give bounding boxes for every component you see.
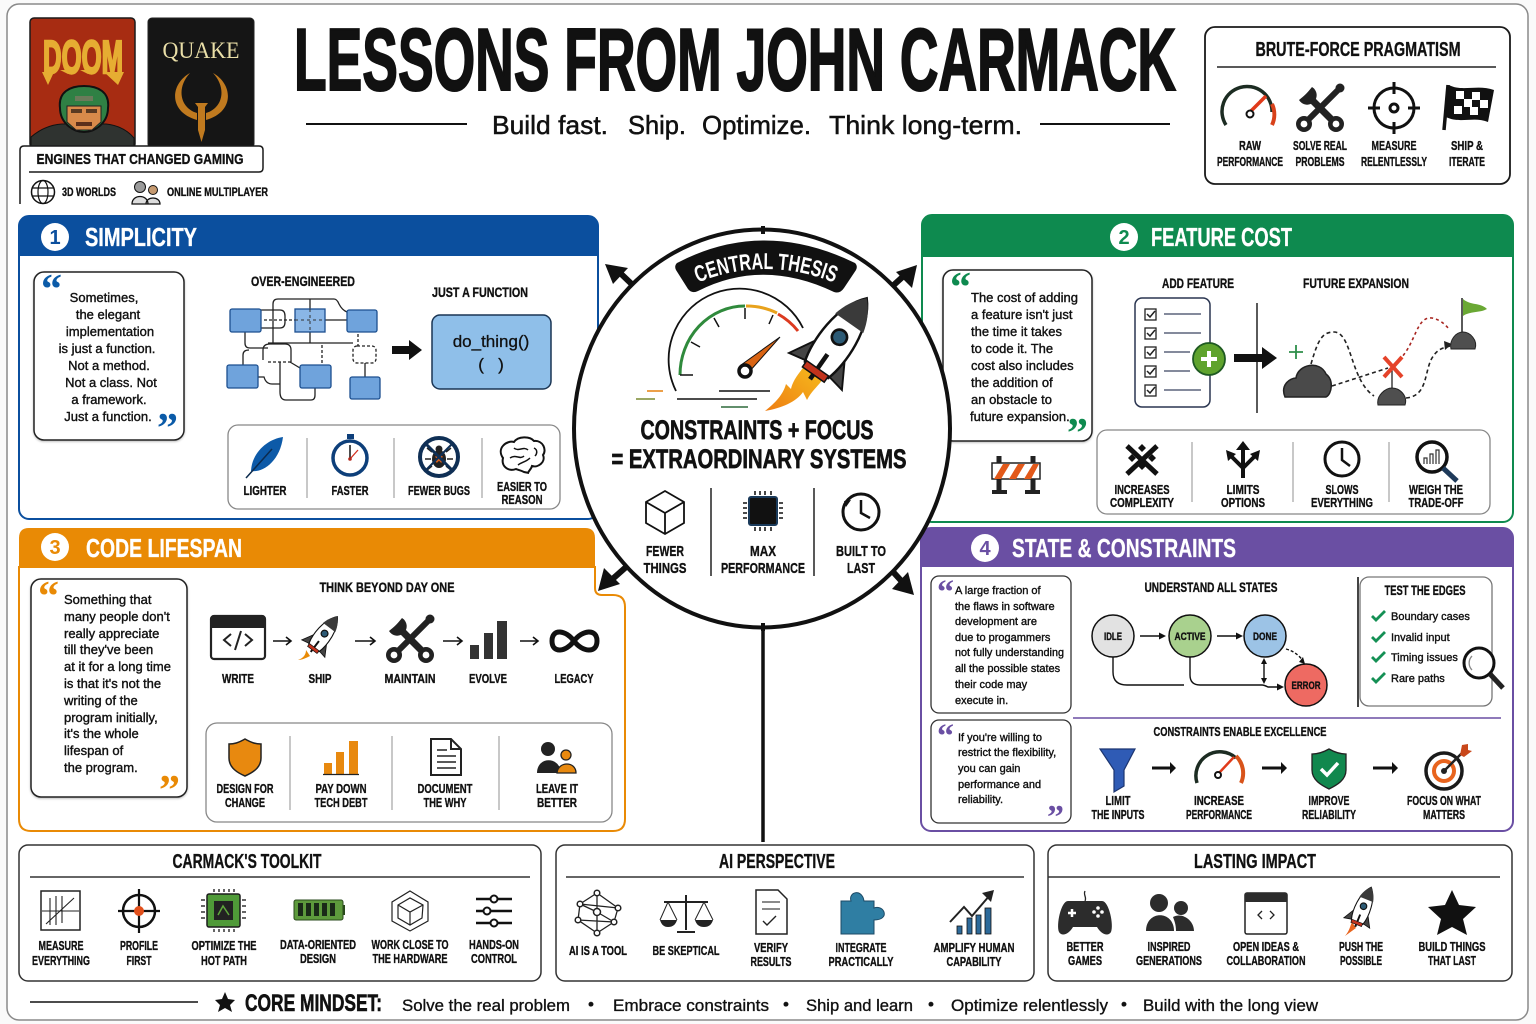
icon: globe, 3D worlds xyxy=(32,180,116,204)
icon: cube, fewer things: THINGS xyxy=(644,560,686,577)
heading: think beyond day one: THINK BEYOND DAY ONE xyxy=(320,579,454,595)
header: simplicity: 1 xyxy=(49,227,61,249)
mindset items: • xyxy=(783,995,789,1014)
tool: work close to the hardware xyxy=(372,891,448,966)
quote: code lifespan: it's the whole xyxy=(64,726,139,741)
state: done: DONE xyxy=(1253,631,1277,643)
impact: open ideas window: OPEN IDEAS & xyxy=(1233,939,1299,954)
mindset items: Solve the real problem xyxy=(402,996,570,1015)
quote: flaws in software: “ xyxy=(937,574,954,611)
mindset items: • xyxy=(928,995,934,1014)
cover: DOOM: DOOM xyxy=(43,31,123,83)
panel: test the edges xyxy=(1358,577,1503,707)
ai: integrate practically puzzle: PRACTICALLY xyxy=(828,954,894,969)
state: active xyxy=(1169,615,1211,657)
icon: evolve bars xyxy=(469,621,507,686)
icon: shield, improve reliability: IMPROVE xyxy=(1308,793,1350,808)
heading: over-engineered: OVER-ENGINEERED xyxy=(251,273,355,289)
quote: simplicity: the elegant xyxy=(76,307,141,322)
icon: bars, pay down tech debt: PAY DOWN xyxy=(316,781,366,796)
quote: restrict the flexibility xyxy=(931,718,1071,836)
quote: feature cost: “ xyxy=(950,265,971,311)
icon: gauge, increase performance: INCREASE xyxy=(1194,793,1244,808)
icon: increases complexity xyxy=(1110,444,1174,510)
icon: weigh the trade-off magnifier: TRADE-OFF xyxy=(1408,495,1464,510)
label: ship and iterate: SHIP & xyxy=(1451,138,1483,153)
label: raw performance: PERFORMANCE xyxy=(1217,154,1283,169)
quote: simplicity: a framework. xyxy=(71,392,147,407)
header: state and constraints: STATE & CONSTRAINTS xyxy=(1012,533,1236,563)
quote: restrict the flexibility: performance and xyxy=(958,779,1041,791)
central thesis circle xyxy=(572,226,952,631)
icon: target, focus on what matters: MATTERS xyxy=(1423,807,1465,822)
icon: brain, easier to reason: REASON xyxy=(502,492,542,507)
impact: better games controller: GAMES xyxy=(1068,953,1102,968)
icon: increases complexity: INCREASES xyxy=(1114,482,1170,497)
label: ship and iterate: ITERATE xyxy=(1449,154,1485,169)
icon: slows everything clock: EVERYTHING xyxy=(1311,495,1373,510)
quote: flaws in software: the flaws in software xyxy=(955,601,1055,613)
mindset items: Optimize relentlessly xyxy=(951,996,1108,1015)
heading: future expansion: FUTURE EXPANSION xyxy=(1303,275,1409,291)
cover: QUAKE: QUAKE xyxy=(162,38,240,63)
icon: funnel, limit the inputs xyxy=(1092,749,1145,822)
icon: maintain tools xyxy=(384,614,436,686)
arrow xyxy=(1152,762,1176,774)
icon: weigh the trade-off magnifier: WEIGH THE xyxy=(1409,482,1463,497)
heading: ai perspective: AI PERSPECTIVE xyxy=(719,851,835,873)
quote: feature cost: ” xyxy=(1067,411,1088,457)
quote: flaws in software: all the possible states xyxy=(955,663,1061,675)
panel 4: state and constraints xyxy=(921,528,1513,836)
icon: bars, pay down tech debt: TECH DEBT xyxy=(314,795,368,810)
icon: ship rocket xyxy=(298,608,349,686)
tool: work close to the hardware: WORK CLOSE TO xyxy=(372,937,448,952)
ai: integrate practically puzzle xyxy=(828,893,894,969)
header: simplicity: SIMPLICITY xyxy=(85,222,197,252)
quote: code lifespan: “ xyxy=(38,574,59,620)
code box: do_thing xyxy=(432,315,551,389)
panel 3: code lifespan xyxy=(19,528,625,831)
impact: push the possible rocket: PUSH THE xyxy=(1339,939,1383,954)
ai: verify results document: RESULTS xyxy=(750,954,792,969)
icon: funnel, limit the inputs: LIMIT xyxy=(1106,793,1131,808)
quote: code lifespan: program initially, xyxy=(64,710,158,725)
icon: globe, 3D worlds: 3D WORLDS xyxy=(62,185,116,199)
heading: add feature: ADD FEATURE xyxy=(1162,275,1234,291)
quote: feature cost: the time it takes xyxy=(971,324,1063,339)
impact: build things star: BUILD THINGS xyxy=(1418,939,1486,954)
icon: ship rocket: SHIP xyxy=(308,671,332,686)
quote: restrict the flexibility: restrict the flexibility, xyxy=(958,747,1056,759)
quote: flaws in software: not fully understanding xyxy=(955,647,1064,659)
tool: optimize the hot path: HOT PATH xyxy=(201,953,247,968)
ai: amplify human capability chart: AMPLIFY HUMAN xyxy=(934,940,1014,955)
icon: feather, lighter xyxy=(244,437,287,498)
code box: do_thing: ( ) xyxy=(478,355,504,374)
ai: amplify human capability chart xyxy=(934,890,1014,969)
state: active: ACTIVE xyxy=(1174,631,1206,643)
quote: code lifespan: writing of the xyxy=(63,693,138,708)
icon: people, online multiplayer: ONLINE MULTIPLAYER xyxy=(167,185,268,199)
subtitle: Optimize. xyxy=(702,110,811,140)
icon: write code window: WRITE xyxy=(222,671,254,686)
quote: feature cost: an obstacle to xyxy=(971,392,1052,407)
icon: chip, max performance: MAX xyxy=(750,543,776,560)
icon: clock, built to last: LAST xyxy=(847,560,875,577)
icon: limits options: OPTIONS xyxy=(1221,495,1265,510)
benefits row xyxy=(228,425,560,509)
icon: star xyxy=(215,992,235,1012)
heading: understand all states: UNDERSTAND ALL STATES xyxy=(1144,579,1278,595)
quote: restrict the flexibility: reliability. xyxy=(958,794,1003,806)
quote: flaws in software: due to progammers xyxy=(955,632,1051,644)
icon: legacy infinity xyxy=(552,632,597,686)
header: simplicity xyxy=(19,216,598,256)
tool: measure everything: MEASURE xyxy=(38,938,84,953)
quote: code lifespan: Something that xyxy=(64,592,152,607)
cover: DOOM xyxy=(30,18,135,148)
panel: test the edges: Boundary cases xyxy=(1391,611,1470,623)
header: feature cost: 2 xyxy=(1118,227,1130,249)
game covers: engines that changed gaming xyxy=(20,18,268,204)
panel: test the edges: Rare paths xyxy=(1391,673,1445,685)
quote: simplicity xyxy=(34,267,184,452)
practices row xyxy=(206,723,612,822)
core mindset strip xyxy=(30,990,1319,1017)
impact: push the possible rocket xyxy=(1339,882,1384,968)
icon: magnifier xyxy=(1464,648,1503,688)
heading: lasting impact: LASTING IMPACT xyxy=(1194,851,1316,873)
subtitle: Think long-term. xyxy=(829,110,1022,140)
heading: constraints enable excellence: CONSTRAINTS ENABLE EXCELLENCE xyxy=(1154,724,1327,739)
icon: shield, design for change: CHANGE xyxy=(225,795,265,810)
label: solve real problems: SOLVE REAL xyxy=(1293,138,1347,153)
tool: work close to the hardware: THE HARDWARE xyxy=(372,951,448,966)
panel: test the edges: Timing issues xyxy=(1391,652,1458,664)
quote: feature cost: to code it. The xyxy=(971,341,1053,356)
code box: do_thing: do_thing() xyxy=(453,332,529,351)
icon: chip, max performance xyxy=(721,491,805,577)
icon: target, focus on what matters: FOCUS ON WHAT xyxy=(1407,793,1481,808)
quote: flaws in software: execute in. xyxy=(955,695,1008,707)
icon: bars, pay down tech debt xyxy=(314,741,368,810)
icon: brain, easier to reason xyxy=(497,437,547,507)
icon: evolve bars: EVOLVE xyxy=(469,671,507,686)
ai: ai is a tool network xyxy=(569,890,627,958)
icon: write code window xyxy=(211,616,265,686)
state: done xyxy=(1244,615,1286,657)
quote: restrict the flexibility: “ xyxy=(937,718,954,755)
quote: restrict the flexibility: If you're willing to xyxy=(958,732,1042,744)
header: feature cost xyxy=(922,215,1513,257)
quote: flaws in software xyxy=(931,574,1071,713)
icon: people, leave it better xyxy=(536,742,578,810)
quote: feature cost: The cost of adding xyxy=(971,290,1078,305)
header: state and constraints: 4 xyxy=(979,538,991,560)
heading: brute-force pragmatism: BRUTE-FORCE PRAGMATISM xyxy=(1256,39,1460,61)
icon: cube, fewer things: FEWER xyxy=(646,543,684,560)
header: feature cost: FEATURE COST xyxy=(1151,222,1292,252)
header: code lifespan: CODE LIFESPAN xyxy=(86,533,242,563)
icon: target, focus on what matters xyxy=(1407,744,1481,822)
icon: crossed-out bug, fewer bugs xyxy=(408,438,470,498)
panel 1: simplicity xyxy=(19,216,598,519)
icon: slows everything clock xyxy=(1311,442,1373,510)
ai: verify results document xyxy=(750,890,792,969)
ai: integrate practically puzzle: INTEGRATE xyxy=(836,940,887,955)
icon: document the why: THE WHY xyxy=(424,795,467,810)
tool: optimize the hot path xyxy=(192,889,257,968)
label: measure relentlessly xyxy=(1361,138,1427,169)
icon: tools xyxy=(1296,84,1344,132)
icon: crossed-out bug, fewer bugs: FEWER BUGS xyxy=(408,483,470,498)
impact: better games controller xyxy=(1058,891,1112,968)
icon: crosshair xyxy=(1368,82,1420,134)
arrow xyxy=(273,637,291,645)
label: solve real problems: PROBLEMS xyxy=(1296,154,1345,169)
quote: code lifespan: at it for a long time xyxy=(64,659,171,674)
quote: simplicity: Sometimes, xyxy=(70,290,138,305)
tool: hands-on control: CONTROL xyxy=(471,951,517,966)
equation text: = EXTRAORDINARY SYSTEMS xyxy=(612,444,906,474)
panel: test the edges: Invalid input xyxy=(1391,632,1450,644)
impact: open ideas window xyxy=(1226,893,1306,968)
icon: gauge, increase performance xyxy=(1186,752,1252,822)
impact: inspired generations people: GENERATIONS xyxy=(1136,953,1202,968)
icon: weigh the trade-off magnifier xyxy=(1408,442,1464,510)
subtitle: Ship. xyxy=(628,110,686,140)
quote: code lifespan: lifespan of xyxy=(64,743,124,758)
label: measure relentlessly: RELENTLESSLY xyxy=(1361,154,1427,169)
quote: feature cost: the addition of xyxy=(971,375,1053,390)
tool: data-oriented design: DATA-ORIENTED xyxy=(280,937,356,952)
quote: simplicity: Not a method. xyxy=(68,358,150,373)
arrow: to state and constraints xyxy=(884,562,914,595)
panel: carmack's toolkit xyxy=(19,845,541,981)
icon: document the why xyxy=(418,739,473,810)
label: core mindset: CORE MINDSET: xyxy=(245,990,382,1017)
label: raw performance: RAW xyxy=(1239,138,1262,153)
icon: people, online multiplayer xyxy=(132,182,268,204)
quote: simplicity: Just a function. xyxy=(64,409,152,424)
panel: lasting impact xyxy=(1048,845,1512,981)
arrow xyxy=(1262,762,1287,774)
icon: speedometer xyxy=(669,289,803,391)
heading: just a function: JUST A FUNCTION xyxy=(432,284,528,300)
quote: simplicity: “ xyxy=(41,267,62,313)
state: error: ERROR xyxy=(1292,680,1321,692)
label: solve real problems xyxy=(1293,138,1347,169)
ai: be skeptical scales xyxy=(652,895,720,958)
subtitle: Build fast. xyxy=(492,110,608,140)
circle body xyxy=(574,230,950,628)
icon: cube, fewer things xyxy=(644,491,686,577)
quote: flaws in software: development are xyxy=(955,616,1037,628)
quote: code lifespan: the program. xyxy=(64,760,138,775)
quote: code lifespan: really appreciate xyxy=(64,626,159,641)
heading: carmack's toolkit: CARMACK'S TOOLKIT xyxy=(172,851,322,873)
panel: test the edges: TEST THE EDGES xyxy=(1384,582,1466,598)
ai: be skeptical scales: BE SKEPTICAL xyxy=(652,943,720,958)
impact: build things star xyxy=(1418,890,1486,968)
ai: verify results document: VERIFY xyxy=(754,940,788,955)
icon: shield, design for change xyxy=(216,739,274,810)
quote: feature cost: a feature isn't just xyxy=(971,307,1073,322)
icon: checklist with plus xyxy=(1135,298,1225,407)
mindset items: Build with the long view xyxy=(1143,996,1319,1015)
equation text: CONSTRAINTS + FOCUS xyxy=(640,415,874,445)
impact: better games controller: BETTER xyxy=(1066,939,1104,954)
arrow xyxy=(1373,762,1398,774)
quote: simplicity: implementation xyxy=(66,324,154,339)
quote: code lifespan xyxy=(31,574,187,814)
impact: build things star: THAT LAST xyxy=(1428,953,1476,968)
panel: brute-force pragmatism xyxy=(1205,27,1510,184)
icon: barricade xyxy=(992,456,1040,492)
icon: stopwatch, faster xyxy=(332,434,369,498)
tool: hands-on control: HANDS-ON xyxy=(469,937,519,952)
quote: restrict the flexibility: ” xyxy=(1047,799,1064,836)
panel: ai perspective xyxy=(556,845,1034,981)
header: state and constraints xyxy=(921,528,1513,567)
tool: optimize the hot path: OPTIMIZE THE xyxy=(192,938,257,953)
icon: people, leave it better: LEAVE IT xyxy=(536,781,578,796)
quote: code lifespan: ” xyxy=(159,768,180,814)
header: code lifespan xyxy=(19,528,595,568)
state: idle: IDLE xyxy=(1104,631,1122,643)
arrow: to just a function xyxy=(392,340,422,360)
mindset items: Ship and learn xyxy=(806,996,913,1015)
quote: flaws in software: their code may xyxy=(955,679,1028,691)
arrow xyxy=(355,637,375,645)
arrow xyxy=(443,637,462,645)
quote: restrict the flexibility: you can gain xyxy=(958,763,1020,775)
impact: inspired generations people: INSPIRED xyxy=(1148,939,1190,954)
icon: clock, built to last: BUILT TO xyxy=(836,543,886,560)
quote: feature cost: future expansion. xyxy=(970,409,1070,424)
diagram: over-engineered boxes xyxy=(227,299,380,400)
ai: amplify human capability chart: CAPABILITY xyxy=(946,954,1002,969)
icon: slows everything clock: SLOWS xyxy=(1326,482,1359,497)
tool: profile first: PROFILE xyxy=(120,938,158,953)
quote: code lifespan: is that it's not the xyxy=(64,676,161,691)
tool: data-oriented design xyxy=(280,900,356,966)
quote: code lifespan: till they've been xyxy=(64,642,153,657)
arrow: to feature cost xyxy=(886,265,917,292)
icon: brain, easier to reason: EASIER TO xyxy=(497,479,547,494)
engines caption box: ENGINES THAT CHANGED GAMING xyxy=(36,151,244,168)
speed lines xyxy=(636,391,770,407)
panel 2: feature cost xyxy=(922,215,1513,522)
quote: feature cost xyxy=(943,265,1092,457)
subtitle xyxy=(306,110,1170,140)
consequences row xyxy=(1097,430,1490,514)
label: ship and iterate xyxy=(1449,138,1485,169)
banner: central thesis: CENTRAL THESIS xyxy=(694,253,838,282)
quote: flaws in software: A large fraction of xyxy=(955,585,1042,597)
icon: limits options xyxy=(1221,441,1265,510)
tool: profile first: FIRST xyxy=(126,953,152,968)
icon: stopwatch, faster: FASTER xyxy=(332,483,369,498)
tool: measure everything: EVERYTHING xyxy=(32,953,90,968)
icon: maintain tools: MAINTAIN xyxy=(384,671,436,686)
icon: feather, lighter: LIGHTER xyxy=(244,483,287,498)
cover: QUAKE xyxy=(148,18,254,148)
quote: code lifespan: many people don't xyxy=(64,609,170,624)
impact: inspired generations people xyxy=(1136,894,1202,968)
tool: data-oriented design: DESIGN xyxy=(300,951,336,966)
icon: chip, max performance: PERFORMANCE xyxy=(721,560,805,577)
arrow: to code lifespan xyxy=(598,560,634,591)
quote: simplicity: is just a function. xyxy=(59,341,155,356)
diagram: future expansion path xyxy=(1284,298,1487,405)
divider and arrow: add feature to future xyxy=(1234,303,1277,413)
icon: rocket xyxy=(765,280,893,411)
label: raw performance xyxy=(1217,138,1283,169)
tool: hands-on control xyxy=(469,896,519,966)
equation text xyxy=(612,415,906,474)
icon: clock, built to last xyxy=(836,494,886,577)
state: error xyxy=(1285,664,1327,706)
quote: feature cost: cost also includes xyxy=(971,358,1074,373)
tool: measure everything xyxy=(32,891,90,968)
icon: legacy infinity: LEGACY xyxy=(554,671,594,686)
quote: simplicity: ” xyxy=(157,406,178,452)
arrow xyxy=(520,637,538,645)
icon: checkered flag xyxy=(1444,85,1494,130)
mindset items: Embrace constraints xyxy=(613,996,769,1015)
icon: increases complexity: COMPLEXITY xyxy=(1110,495,1174,510)
central stem xyxy=(761,625,765,842)
arrow: to simplicity xyxy=(605,264,640,292)
impact: push the possible rocket: POSSIBLE xyxy=(1340,953,1382,968)
engines caption box xyxy=(20,146,263,204)
icon: people, leave it better: BETTER xyxy=(537,795,577,810)
impact: open ideas window: COLLABORATION xyxy=(1226,953,1306,968)
icon: gauge, increase performance: PERFORMANCE xyxy=(1186,807,1252,822)
banner: central thesis xyxy=(675,240,857,292)
mindset items: • xyxy=(588,995,594,1014)
icon: shield, improve reliability: RELIABILITY xyxy=(1302,807,1356,822)
icon: document the why: DOCUMENT xyxy=(418,781,473,796)
tool: profile first xyxy=(118,889,160,968)
mindset items: • xyxy=(1121,995,1127,1014)
state: idle xyxy=(1092,615,1134,657)
header: code lifespan: 3 xyxy=(49,537,61,559)
quote: simplicity: Not a class. Not xyxy=(65,375,157,390)
icon: shield, improve reliability xyxy=(1302,749,1356,822)
mindset items xyxy=(402,995,1319,1015)
ai: ai is a tool network: AI IS A TOOL xyxy=(569,943,627,958)
icon: raw performance gauge xyxy=(1222,86,1274,125)
state machine diagram xyxy=(1092,615,1327,706)
icon: funnel, limit the inputs: THE INPUTS xyxy=(1092,807,1145,822)
label: measure relentlessly: MEASURE xyxy=(1372,138,1417,153)
icon: shield, design for change: DESIGN FOR xyxy=(216,781,274,796)
icon: limits options: LIMITS xyxy=(1226,482,1260,497)
